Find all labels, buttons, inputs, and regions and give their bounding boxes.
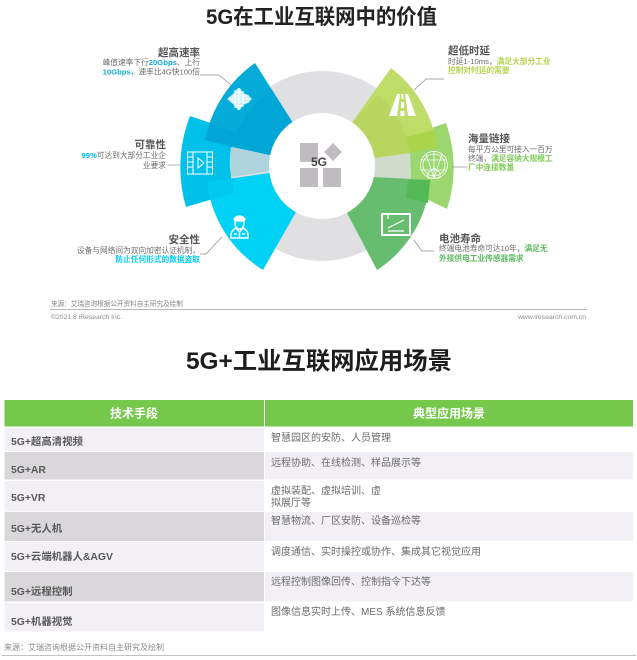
- center circle: [269, 113, 375, 219]
- callout: battery life: 终端电池寿命可达10年，满足无: [439, 243, 548, 253]
- title: application scenarios: 5G+工业互联网应用场景: [186, 348, 452, 375]
- footer: first chart: ©2021.8 iResearch Inc.: [51, 313, 122, 321]
- callout: reliability: [81, 138, 180, 170]
- table: [4, 400, 633, 632]
- row: machine vision: [4, 603, 445, 632]
- row: ultra HD video: [4, 428, 391, 451]
- sector: security: [207, 173, 296, 270]
- row: cloud robots and AGV: [4, 542, 481, 571]
- row: machine vision: 图像信息实时上传、MES 系统信息反馈: [271, 605, 445, 618]
- footer: first chart: 来源：艾瑞咨询根据公开资料自主研究及绘制: [51, 299, 183, 308]
- callout: reliability: 99%可达到大部分工业企: [81, 150, 166, 160]
- row: VR: 5G+VR: [11, 493, 46, 504]
- speed overlap: [205, 123, 237, 147]
- callout: massive connection: 海量链接: [468, 132, 510, 145]
- massive connection light wedge: [374, 153, 411, 179]
- sector: low latency: [351, 68, 437, 158]
- row: VR: 虚拟装配、虚拟培训、虚: [271, 484, 381, 497]
- callout: security: 防止任何形式的数据盗取: [115, 254, 200, 264]
- callout: battery life: 外接供电工业传感器需求: [439, 253, 524, 263]
- row: VR: [4, 481, 381, 512]
- callout: security: [77, 233, 222, 264]
- callout: high speed: 超高速率: [158, 46, 200, 59]
- callout: massive connection: 每平方公里可接入一百万: [468, 144, 553, 154]
- footer: first chart: [50, 299, 587, 321]
- row: AR: 远程协助、在线检测、样品展示等: [271, 456, 421, 469]
- row: cloud robots and AGV: 调度通信、实时操控或协作、集成其它视觉应用: [271, 545, 481, 558]
- callout: low latency: 超低时延: [448, 44, 490, 57]
- row: remote control: [4, 572, 633, 602]
- callout: massive connection: 厂中连接数量: [468, 162, 514, 172]
- row: ultra HD video: 智慧园区的安防、人员管理: [271, 431, 391, 444]
- sector: speed: [205, 63, 293, 155]
- callout: high speed: 10Gbps，速率比4G快100倍: [103, 66, 200, 76]
- callout: low latency: [414, 44, 551, 90]
- table header: 技术手段: [110, 406, 158, 420]
- row: cloud robots and AGV: 5G+云端机器人&AGV: [11, 550, 113, 563]
- row: drones: 5G+无人机: [11, 522, 63, 535]
- radial diagram: [180, 63, 454, 270]
- callout: security: 安全性: [168, 233, 200, 246]
- footer: table source: 来源：艾瑞咨询根据公开资料自主研究及绘制: [4, 642, 164, 652]
- center 5G icon: [300, 143, 342, 187]
- callout: battery life: [414, 232, 548, 263]
- callout: low latency: 控制对时延的需要: [448, 65, 510, 75]
- row: drones: [4, 512, 633, 541]
- row: remote control: 5G+远程控制: [11, 585, 72, 598]
- row: remote control: 远程控制图像回传、控制指令下达等: [271, 575, 431, 588]
- speed inner shade: [232, 90, 293, 155]
- row: drones: 智慧物流、厂区安防、设备巡检等: [271, 514, 421, 527]
- security overlap: [207, 178, 233, 200]
- callout: reliability: 可靠性: [134, 138, 166, 151]
- sector: reliability: [180, 116, 237, 207]
- row: AR: 5G+AR: [11, 465, 46, 476]
- callout: reliability: 业要求: [143, 160, 166, 170]
- low latency inner shade: [351, 95, 410, 158]
- low latency overlap: [406, 130, 437, 153]
- icon: globe network: [420, 152, 448, 178]
- row: ultra HD video: 5G+超高清视频: [11, 435, 83, 448]
- table header: 典型应用场景: [413, 406, 485, 420]
- title: value of 5G: 5G在工业互联网中的价值: [206, 6, 437, 29]
- grey ring: [227, 71, 417, 261]
- row: machine vision: 5G+机器视觉: [11, 615, 72, 628]
- center 5G icon: 5G: [311, 155, 327, 169]
- table header: [4, 400, 633, 426]
- callout: massive connection: [452, 132, 553, 172]
- icon: road: [389, 94, 416, 116]
- reliability light wedge: [230, 147, 271, 177]
- sector: battery life: [347, 177, 430, 270]
- callout: high speed: [103, 46, 231, 85]
- row: AR: [4, 452, 633, 480]
- icon: security guard: [231, 216, 248, 238]
- icon: waveform: [227, 88, 252, 110]
- callout: massive connection: 终端，满足容纳大规模工: [468, 153, 553, 163]
- icon: video film: [188, 152, 212, 174]
- callout: low latency: 时延1-10ms，满足大部分工业: [448, 56, 551, 66]
- sector: massive connection: [406, 123, 454, 209]
- callout: security: 设备与网络间为双向加密认证机制，: [77, 245, 200, 255]
- footer: first chart: www.iresearch.com.cn: [517, 314, 586, 321]
- battery life overlap: [406, 180, 430, 203]
- callout: battery life: 电池寿命: [439, 232, 481, 245]
- callout: high speed: 峰值速率下行20Gbps、上行: [103, 57, 200, 67]
- row: VR: 拟展厅等: [271, 496, 311, 509]
- icon: tablet chart: [382, 214, 410, 235]
